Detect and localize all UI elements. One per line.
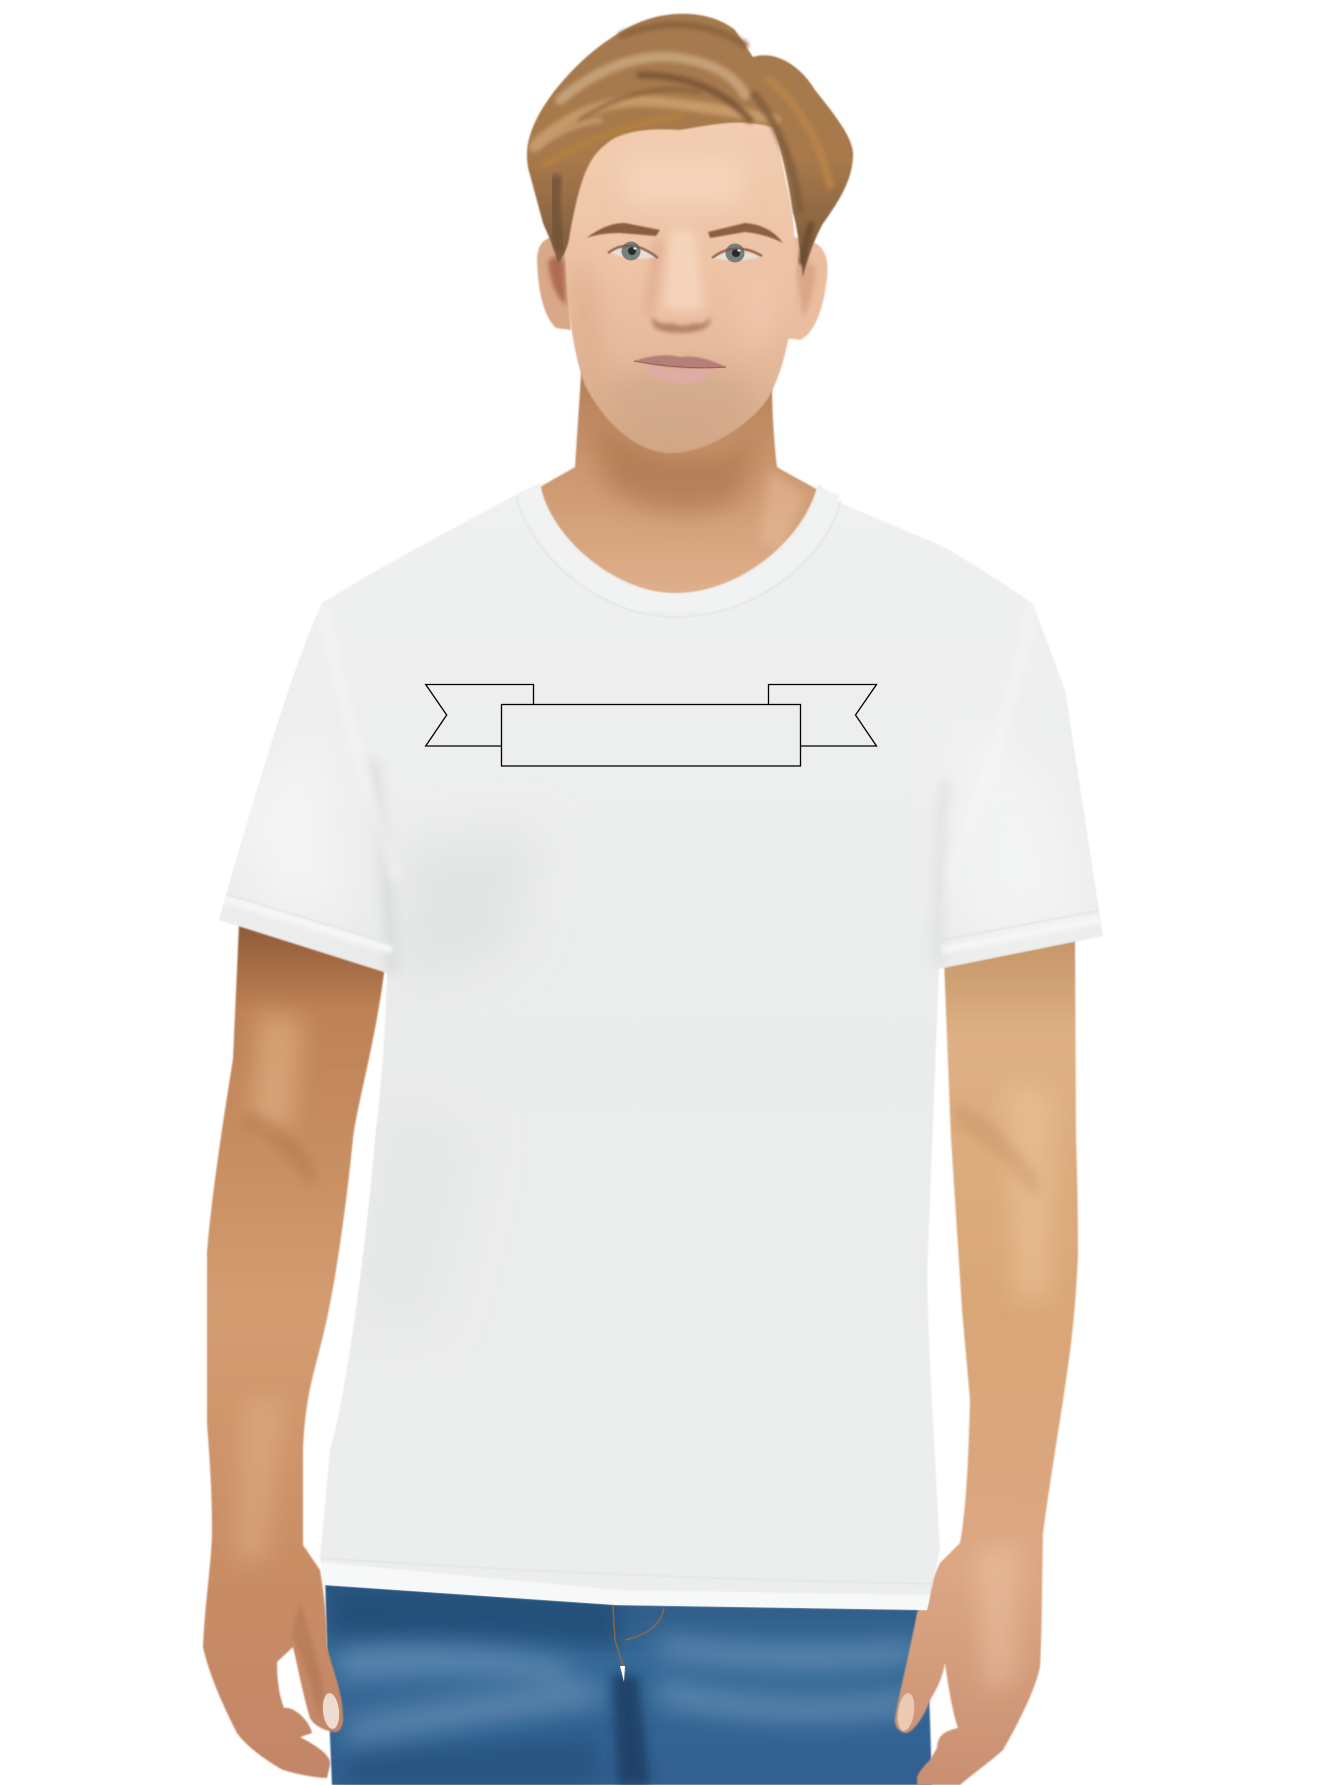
shirt shading <box>412 856 508 952</box>
hair strands <box>535 101 775 145</box>
left eye <box>608 242 658 260</box>
thumbnail <box>895 1692 917 1732</box>
fly seam <box>613 1606 664 1672</box>
jeans <box>325 1570 932 1785</box>
left ear <box>537 238 571 330</box>
face <box>565 120 795 453</box>
hem <box>322 1563 930 1610</box>
collar <box>528 490 829 605</box>
left eyebrow <box>586 223 660 238</box>
t-shirt <box>219 483 1106 1620</box>
right arm and hand <box>895 935 1078 1785</box>
ribbon right tail <box>768 684 876 746</box>
ribbon banner <box>426 684 876 766</box>
nose <box>644 230 710 333</box>
mouth <box>634 355 726 384</box>
left arm and hand <box>203 925 385 1778</box>
ribbon center panel <box>502 704 800 766</box>
face shading <box>568 268 601 372</box>
neck <box>540 360 818 598</box>
sleeve seams <box>378 817 390 864</box>
ribbon left tail <box>426 684 534 746</box>
right ear <box>785 235 828 340</box>
figure: man in white t-shirt with ribbon banner <box>202 12 1103 1785</box>
thumbnail <box>321 1692 341 1730</box>
right eye <box>712 244 762 262</box>
right eyebrow <box>708 223 783 243</box>
hair <box>527 14 853 277</box>
sleeve cuffs <box>224 898 392 950</box>
